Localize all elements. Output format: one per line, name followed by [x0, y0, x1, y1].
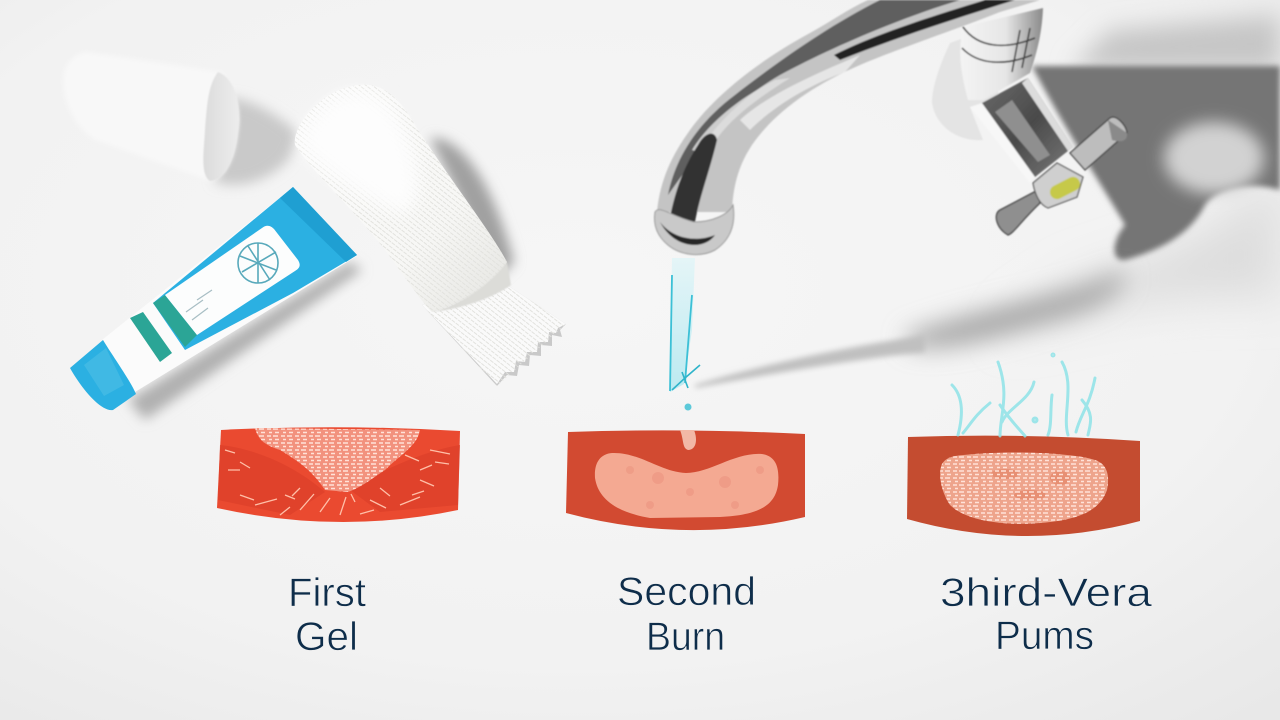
bandage roll, long: [295, 85, 511, 312]
handle hub: [1033, 163, 1083, 208]
label: first: First: [288, 571, 366, 615]
gel tube: [70, 187, 357, 410]
label: second: Second: [617, 570, 756, 614]
water stream: [670, 258, 700, 410]
water drop: [684, 404, 692, 410]
charred centre: [940, 453, 1108, 524]
dripping drop: [680, 430, 696, 450]
label: third: 3hird-Vera: [940, 571, 1153, 615]
tube label emblem: [238, 243, 278, 283]
yellow indicator: [1048, 174, 1082, 202]
burn patch: first degree: [217, 427, 460, 522]
label: first: [288, 571, 366, 659]
tube label: [165, 226, 300, 335]
gauze roll, short: [63, 52, 239, 181]
spout lower dark strip: [670, 134, 717, 222]
tube blue wrap: [153, 187, 357, 350]
blister spots: [626, 466, 764, 509]
faucet spout: [655, 0, 1040, 255]
spout highlight: [692, 78, 790, 155]
valve neck: [960, 8, 1043, 100]
spout mouth ring: [655, 205, 734, 255]
darker red triangles: [218, 445, 460, 515]
label: third: Pums: [995, 614, 1094, 658]
label: third: [940, 571, 1153, 658]
cast shadows of faucet: [695, 15, 1280, 388]
spout black streak: [834, 0, 1015, 60]
valve grooves: [962, 27, 1035, 72]
bandage tail strip: [422, 285, 566, 386]
spout dark upper band: [668, 0, 960, 195]
steam lines: [952, 354, 1095, 436]
label: second: Burn: [646, 615, 725, 659]
tube cap: [70, 340, 136, 410]
orange blotches: [991, 469, 1070, 500]
burn patch: second degree: [566, 430, 805, 530]
chrome valve body: [982, 78, 1073, 177]
tube small print: [186, 290, 212, 320]
white valve strip: [970, 103, 1035, 183]
roll highlight: [300, 91, 418, 215]
tube teal bands: [153, 295, 197, 347]
label: second: [617, 570, 756, 659]
label: first: Gel: [295, 615, 358, 659]
light fissures: [225, 450, 450, 515]
tap handle arms: [1070, 117, 1127, 170]
tube crimp: [280, 187, 357, 262]
pale hatched centre: [255, 428, 420, 492]
burn patch: third degree: [907, 436, 1140, 536]
white valve cylinder: [932, 30, 1000, 140]
blister: [595, 453, 778, 518]
shadows of bandages and tube: [128, 98, 514, 420]
tube body: [102, 187, 357, 392]
faucet valve: [932, 8, 1127, 235]
